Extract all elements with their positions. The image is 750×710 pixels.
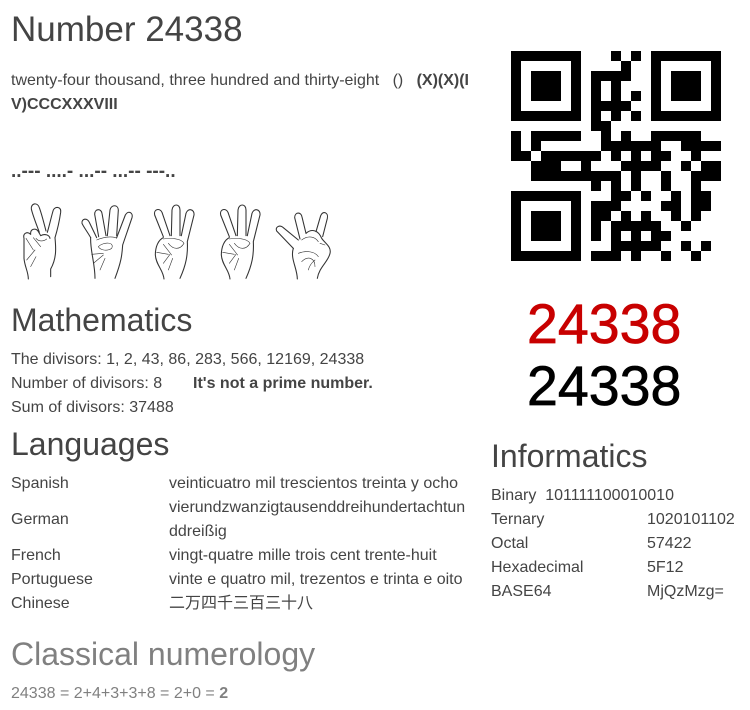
title: Number 24338 [11, 10, 243, 49]
icon: finger number hands [23, 203, 331, 280]
panel: mathematics facts [11, 351, 373, 416]
icon: hand digit 2 [24, 204, 61, 279]
divisors list: The divisors: 1, 2, 43, 86, 283, 566, 12169, 24338 [11, 351, 364, 368]
table: languages: vingt-quatre mille trois cent trente-huit [169, 547, 437, 564]
table: informatics: Hexadecimal [491, 559, 583, 576]
sum of divisors: Sum of divisors: 37488 [11, 399, 174, 416]
red number: 24338 [527, 293, 681, 355]
number of divisors and prime status [11, 375, 373, 392]
table: languages: veinticuatro mil trescientos treinta y ocho [169, 475, 458, 492]
heading: Mathematics: Mathematics [11, 302, 192, 338]
QR code [511, 51, 721, 261]
table: informatics: Ternary [491, 511, 544, 528]
black number: 24338 [527, 355, 681, 417]
table: languages: German [11, 511, 69, 528]
table: informatics: BASE64 [491, 583, 551, 600]
heading: Languages: Languages [11, 426, 169, 462]
number of divisors and prime status: It's not a prime number. [193, 375, 373, 392]
heading: Informatics: Informatics [491, 438, 647, 474]
number name and roman numeral: twenty-four thousand, three hundred and thirty-eight () (X)(X)(I [11, 72, 469, 89]
table: informatics: MjQzMzg= [647, 583, 724, 600]
morse code: ..--- ....- ...-- ...-- ---.. [11, 161, 176, 182]
table: languages: French [11, 547, 61, 564]
table: languages: Spanish [11, 475, 69, 492]
number name and roman numeral: V)CCCXXXVIII [11, 96, 118, 113]
number name and roman numeral [11, 72, 469, 113]
table: languages: Portuguese [11, 571, 93, 588]
icon: hand digit 3 repeated [220, 205, 260, 279]
table: languages: vinte e quatro mil, trezentos e trinta e oito [169, 571, 462, 588]
icon: hand digit 3 [154, 205, 194, 279]
numerology sum: 24338 = 2+4+3+3+8 = 2+0 = 2 [11, 685, 228, 702]
table: informatics: Octal [491, 535, 528, 552]
table: informatics: 5F12 [647, 559, 683, 576]
table: informatics: Binary 101111100010010 [491, 487, 674, 504]
icon: hand digit 8 [276, 213, 330, 279]
table: languages: ddreißig [169, 523, 227, 540]
table: informatics: 1020101102 [647, 511, 735, 528]
number of divisors and prime status: Number of divisors: 8 [11, 375, 162, 392]
table: languages: Chinese [11, 595, 70, 612]
table: languages: vierundzwanzigtausenddreihundertachtun [169, 499, 465, 516]
table: informatics [491, 487, 735, 600]
table: languages: 二万四千三百三十八 [169, 595, 313, 612]
heading: Classical numerology: Classical numerology [11, 636, 315, 672]
icon: hand digit 4 [82, 206, 132, 278]
table: informatics: 57422 [647, 535, 692, 552]
table: languages [11, 475, 465, 612]
